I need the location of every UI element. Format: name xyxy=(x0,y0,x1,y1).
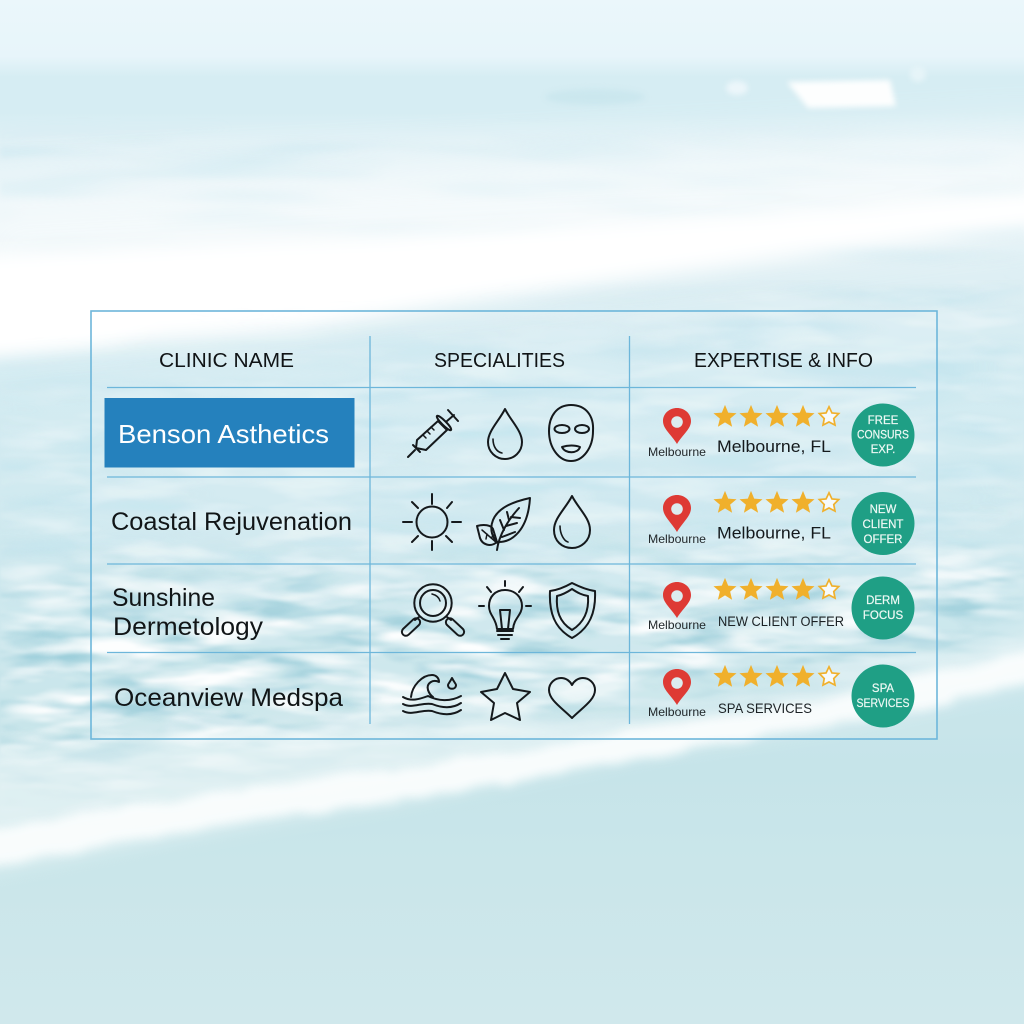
clinic: Coastal Rejuvenation: Coastal Rejuvenation xyxy=(111,508,352,536)
location pin xyxy=(648,408,706,459)
heading: expertise and info: EXPERTISE & INFO xyxy=(694,350,873,372)
badge: spa services xyxy=(852,664,914,728)
badge: spa services: SERVICES xyxy=(856,698,910,710)
offer text: NEW CLIENT OFFER xyxy=(718,613,844,629)
badge: derm focus: DERM xyxy=(866,595,900,607)
location pin xyxy=(648,495,706,546)
speciality icons xyxy=(400,405,595,720)
icon: water drop xyxy=(554,496,590,548)
clinic: Oceanview Medspa: Oceanview Medspa xyxy=(114,684,343,712)
icon: water drop xyxy=(488,409,522,459)
icon: leaves xyxy=(477,498,530,550)
expertise row 3 xyxy=(648,576,914,640)
icon: star outline xyxy=(481,673,530,720)
badge: new client offer xyxy=(852,492,914,555)
icon: magnifier xyxy=(400,584,466,637)
location pin: Melbourne xyxy=(648,445,706,459)
table frame xyxy=(91,311,937,739)
expertise row 4 xyxy=(648,664,914,728)
location text: Melbourne, FL xyxy=(717,524,831,542)
heading: clinic name: CLINIC NAME xyxy=(159,350,294,372)
header row xyxy=(159,350,873,372)
expertise row 1 xyxy=(648,404,914,466)
icon: syringe xyxy=(408,410,458,457)
rating stars xyxy=(713,665,839,687)
location pin: Melbourne xyxy=(648,532,706,546)
badge: new client offer: CLIENT xyxy=(863,519,903,531)
icon: light bulb xyxy=(479,581,531,639)
badge: new client offer: NEW xyxy=(870,504,897,516)
badge: free consultation: CONSURS xyxy=(857,430,909,442)
clinic: Sunshine Dermetology xyxy=(112,584,264,641)
badge: free consultation xyxy=(852,404,914,466)
icon: sun xyxy=(403,494,461,550)
expertise row 2 xyxy=(648,491,914,555)
location pin xyxy=(648,582,706,632)
badge: spa services: SPA xyxy=(872,683,894,695)
icon: face mask xyxy=(549,405,593,461)
rating stars xyxy=(713,578,839,600)
badge: new client offer: OFFER xyxy=(864,534,902,546)
badge: free consultation: EXP. xyxy=(871,444,895,456)
clinic: Sunshine Dermetology: Dermetology xyxy=(113,613,264,641)
highlighted clinic: Benson Asthetics: Benson Asthetics xyxy=(118,419,329,449)
table grid lines xyxy=(107,336,916,724)
location pin: Melbourne xyxy=(648,618,706,632)
table panel xyxy=(91,311,937,739)
rating stars xyxy=(713,405,839,427)
location text: Melbourne, FL xyxy=(717,437,831,456)
rating stars xyxy=(713,491,839,513)
badge: derm focus xyxy=(852,576,914,640)
highlighted clinic: Benson Asthetics xyxy=(104,398,354,468)
icon: shield xyxy=(550,583,595,638)
icon: heart xyxy=(549,678,595,718)
icon: ocean wave xyxy=(403,675,461,714)
location pin: Melbourne xyxy=(648,705,706,719)
badge: derm focus: FOCUS xyxy=(863,610,903,622)
badge: free consultation: FREE xyxy=(868,415,899,427)
clinic names xyxy=(104,398,354,712)
services text: SPA SERVICES xyxy=(718,700,812,716)
clinic: Sunshine Dermetology: Sunshine xyxy=(112,584,215,612)
heading: specialities: SPECIALITIES xyxy=(434,350,565,372)
location pin xyxy=(648,669,706,719)
